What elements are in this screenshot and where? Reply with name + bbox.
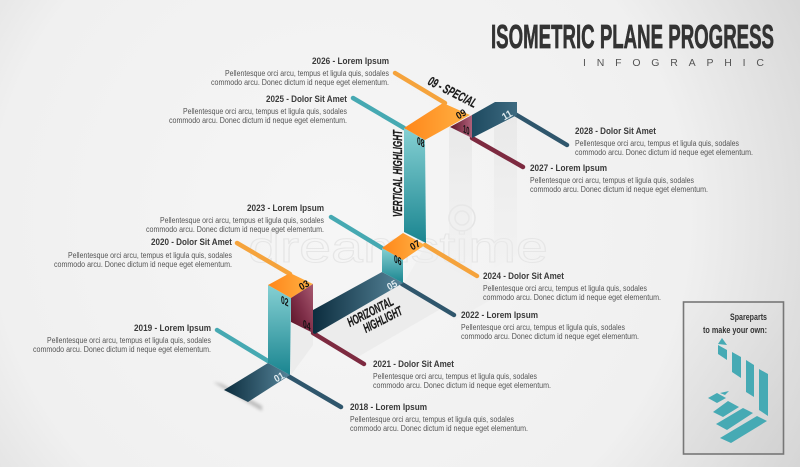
text block: 2025: 2025 - Dolor Sit Amet [266, 94, 347, 104]
step numbers: 04 [303, 318, 311, 334]
text block: 2021: commodo arcu. Donec dictum id neque eget elementum. [373, 381, 551, 390]
text block: 2019: 2019 - Lorem Ipsum [134, 323, 211, 333]
text block: 2018: Pellentesque orci arcu, tempus et ligula quis, sodales [350, 415, 514, 424]
step numbers: 01 [272, 370, 287, 385]
step 08 teal wall [404, 128, 426, 243]
text block: 2022: Pellentesque orci arcu, tempus et ligula quis, sodales [461, 323, 625, 332]
spareparts heading: to make your own: [703, 325, 767, 335]
watermark: dreamstime [248, 223, 548, 272]
line: 2023 [331, 217, 382, 248]
step 06 teal wall [382, 248, 403, 283]
text block: 2023: 2023 - Lorem Ipsum [247, 203, 324, 213]
text block: 2024: 2024 - Dolor Sit Amet [483, 271, 564, 281]
spareparts heading: Spareparts [730, 312, 767, 322]
text block: 2022: 2022 - Lorem Ipsum [461, 310, 538, 320]
step 07 orange top [382, 233, 425, 260]
text block: 2025: Pellentesque orci arcu, tempus et ligula quis, sodales [183, 107, 347, 116]
text block: 2028 [575, 126, 753, 157]
text block: 2026 [211, 56, 389, 87]
spareparts shapes [708, 338, 768, 443]
text block: 2026: Pellentesque orci arcu, tempus et ligula quis, sodales [225, 69, 389, 78]
text block: 2019: Pellentesque orci arcu, tempus et ligula quis, sodales [47, 336, 211, 345]
label: 09 special: 09 - SPECIAL [426, 73, 480, 111]
text block: 2027: Pellentesque orci arcu, tempus et ligula quis, sodales [530, 176, 694, 185]
step 01 dark plane [224, 363, 290, 402]
text block: 2023: Pellentesque orci arcu, tempus et ligula quis, sodales [160, 216, 324, 225]
title [491, 18, 774, 69]
line: 2025 [353, 98, 404, 128]
text block: 2023 [146, 203, 324, 234]
line: 2021 [313, 333, 364, 364]
text block: 2018: commodo arcu. Donec dictum id neque eget elementum. [350, 424, 528, 433]
step numbers: 03 [297, 278, 312, 293]
watermark [248, 205, 548, 272]
line: 2024 [425, 245, 477, 276]
text block: 2021: Pellentesque orci arcu, tempus et ligula quis, sodales [373, 372, 537, 381]
step 03 orange top [268, 273, 313, 298]
step numbers: 09 [454, 107, 469, 122]
text block: 2027 [530, 163, 708, 194]
text block: 2020: Pellentesque orci arcu, tempus et ligula quis, sodales [68, 251, 232, 260]
text block: 2028: Pellentesque orci arcu, tempus et ligula quis, sodales [575, 139, 739, 148]
text block: 2023: commodo arcu. Donec dictum id neque eget elementum. [146, 225, 324, 234]
label: horizontal highlight: HORIZONTAL [345, 294, 396, 330]
step numbers: 08 [417, 135, 425, 151]
text block: 2021: 2021 - Dolor Sit Amet [373, 359, 454, 369]
text block: 2022 [461, 310, 639, 341]
line: 2022 [402, 284, 454, 315]
step 05 dark plane [313, 272, 403, 334]
floor shadows [213, 115, 517, 411]
text block: 2025: commodo arcu. Donec dictum id neque eget elementum. [169, 116, 347, 125]
title: INFOGRAPHIC [583, 57, 764, 69]
line: 2027 [472, 138, 523, 167]
text block: 2018 [350, 402, 528, 433]
text block: 2028: commodo arcu. Donec dictum id neque eget elementum. [575, 148, 753, 157]
text block: 2019 [33, 323, 211, 354]
step 04 maroon wall [291, 284, 313, 333]
text block: 2022: commodo arcu. Donec dictum id neque eget elementum. [461, 332, 639, 341]
text block: 2024: Pellentesque orci arcu, tempus et ligula quis, sodales [483, 284, 647, 293]
text block: 2027: commodo arcu. Donec dictum id neque eget elementum. [530, 185, 708, 194]
text block: 2026: 2026 - Lorem Ipsum [312, 56, 389, 66]
step 02 teal wall [268, 285, 291, 375]
text block: 2020: commodo arcu. Donec dictum id neque eget elementum. [54, 260, 232, 269]
connector lines [217, 73, 567, 407]
spareparts heading [703, 312, 767, 335]
text block: 2024: commodo arcu. Donec dictum id neque eget elementum. [483, 293, 661, 302]
line: 2018 [288, 376, 341, 407]
step numbers: 10 [463, 123, 470, 138]
text block: 2025 [169, 94, 347, 125]
step 10 maroon wall [450, 115, 472, 138]
text block: 2024 [483, 271, 661, 302]
step numbers: 06 [394, 253, 402, 269]
text block: 2021 [373, 359, 551, 390]
label: vertical highlight: VERTICAL HIGHLIGHT [390, 129, 405, 217]
line: 2026 [395, 73, 445, 103]
panel: spareparts [684, 302, 784, 454]
text block: 2027: 2027 - Lorem Ipsum [530, 163, 607, 173]
line: 2028 [515, 114, 567, 145]
label: horizontal highlight: HIGHLIGHT [361, 303, 405, 336]
text block: 2028: 2028 - Dolor Sit Amet [575, 126, 656, 136]
step 09 orange top [404, 103, 470, 140]
line: 2019 [217, 330, 268, 361]
label: horizontal highlight [345, 294, 405, 336]
text block: 2018: 2018 - Lorem Ipsum [350, 402, 427, 412]
step numbers [272, 107, 515, 385]
step numbers: 05 [385, 278, 400, 293]
text block: 2020 [54, 237, 232, 269]
step numbers: 02 [281, 294, 289, 310]
line: 2020 [237, 243, 290, 274]
text block: 2019: commodo arcu. Donec dictum id neque eget elementum. [33, 345, 211, 354]
step numbers: 07 [408, 238, 423, 253]
step 11 dark arrow plane [472, 102, 517, 138]
step numbers: 11 [500, 108, 515, 123]
text block: 2026: commodo arcu. Donec dictum id neque eget elementum. [211, 78, 389, 87]
text block: 2020: 2020 - Dolor Sit Amet [151, 237, 232, 247]
